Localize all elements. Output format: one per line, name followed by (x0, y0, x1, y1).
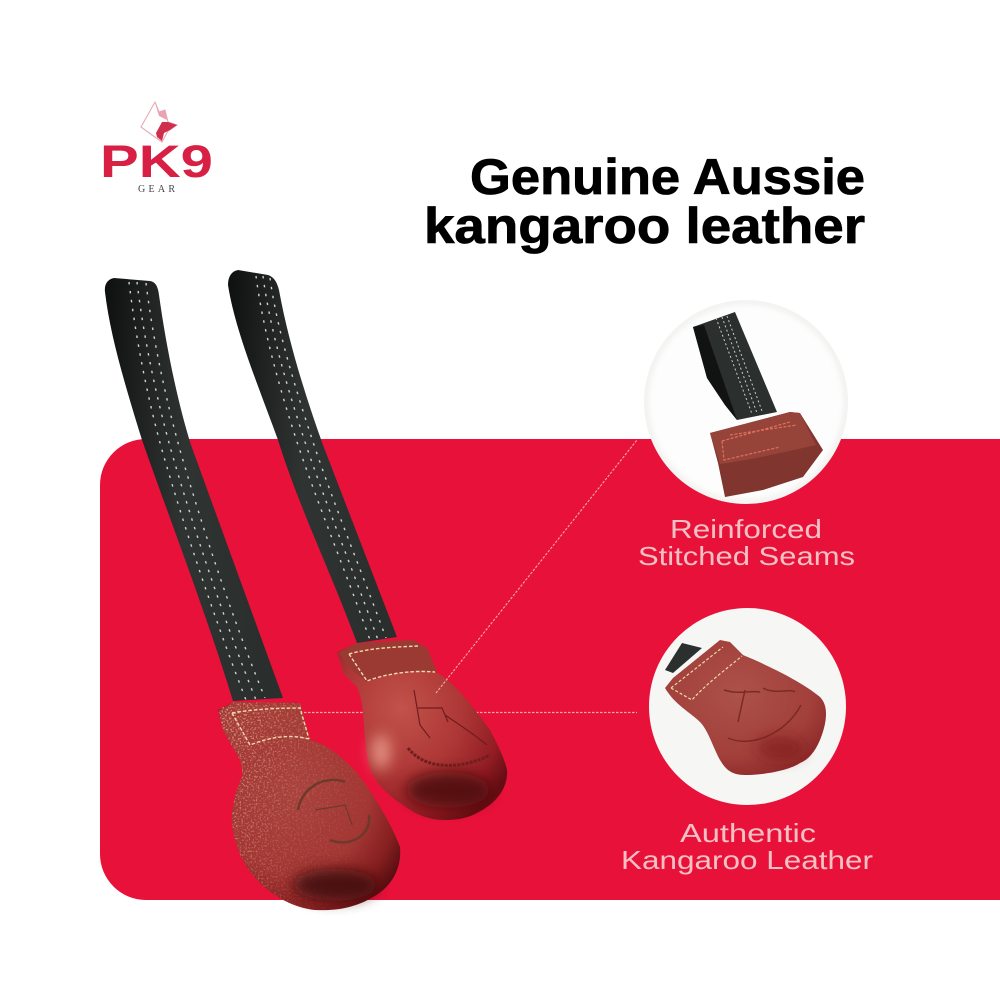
title: Genuine Aussie (470, 149, 865, 205)
logo subtitle: GEAR (138, 184, 175, 195)
label: reinforced stitched seams: Stitched Seams (638, 541, 855, 571)
title: kangaroo leather (424, 198, 865, 254)
label: authentic kangaroo leather: Authentic (680, 818, 816, 848)
label: reinforced stitched seams (638, 514, 855, 571)
icon: dog head (141, 102, 177, 142)
label: reinforced stitched seams: Reinforced (670, 514, 822, 544)
product: right boxing-glove tug (337, 640, 507, 820)
circle image: leather close-up (649, 608, 846, 805)
logo: PK9 Gear (100, 102, 213, 195)
callout: authentic kangaroo leather (621, 608, 873, 875)
title (424, 149, 865, 254)
label: authentic kangaroo leather (621, 818, 873, 875)
label: authentic kangaroo leather: Kangaroo Leather (621, 845, 873, 875)
circle image: stitched seam close-up (644, 300, 848, 504)
callout: reinforced stitched seams (638, 300, 855, 571)
infographic canvas (100, 102, 1000, 912)
product: right tug strap (228, 270, 397, 643)
product: left boxing-glove tug (218, 702, 400, 910)
logo wordmark: PK9 (100, 136, 213, 187)
callout line: diagonal (436, 440, 637, 693)
panel: red background (100, 439, 1000, 900)
callout line: horizontal (300, 712, 637, 714)
product: left tug strap (105, 278, 283, 701)
